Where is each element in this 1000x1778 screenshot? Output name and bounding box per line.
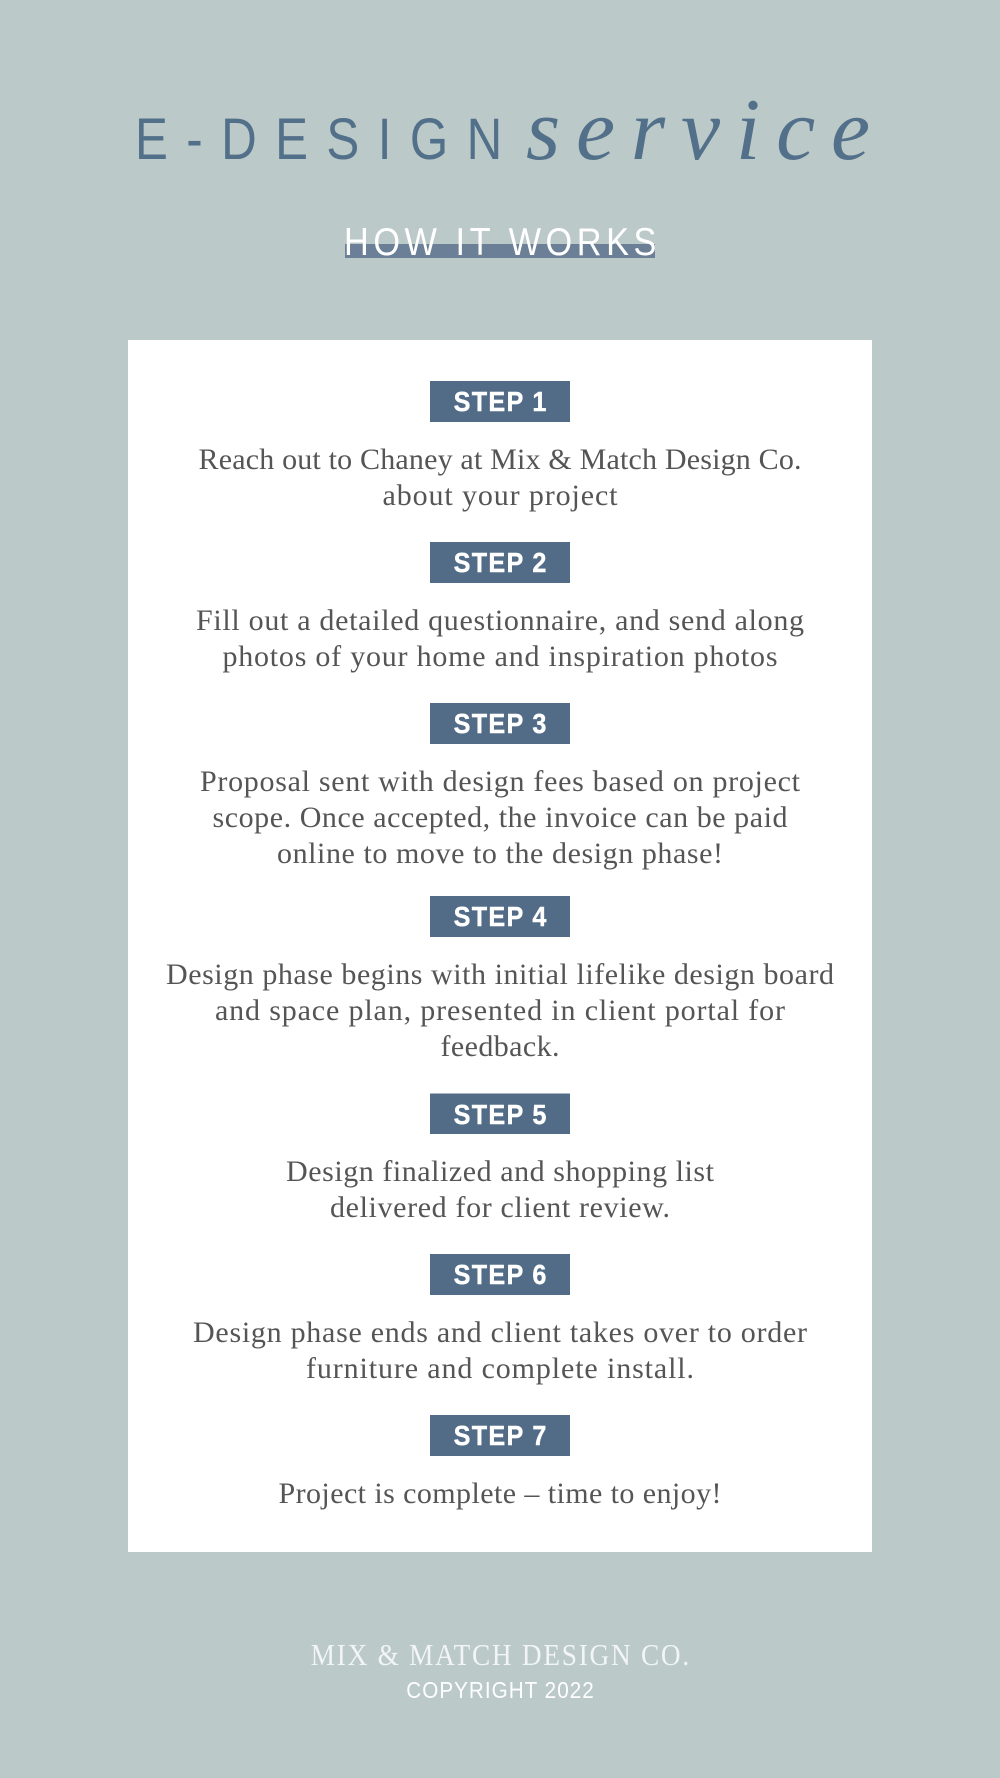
step 4: and space plan, presented in client portal for	[215, 994, 785, 1027]
step 3: online to move to the design phase!	[277, 837, 723, 870]
step 3	[200, 703, 801, 870]
step 4	[166, 896, 834, 1063]
step 7: Project is complete – time to enjoy!	[278, 1477, 722, 1510]
step 6: STEP 6	[454, 1259, 546, 1290]
subtitle: how it works: HOW IT WORKS	[344, 220, 656, 263]
step 2	[196, 542, 804, 673]
step 5: delivered for client review.	[330, 1191, 670, 1224]
step 1	[198, 381, 802, 512]
title	[135, 82, 870, 179]
title: E-DESIGN	[135, 107, 502, 172]
step 1: about your project	[382, 479, 618, 512]
step 4: Design phase begins with initial lifelike design board	[166, 958, 834, 991]
step 1: Reach out to Chaney at Mix & Match Design Co.	[198, 443, 802, 476]
step 6: Design phase ends and client takes over to order	[193, 1316, 807, 1349]
step 1: STEP 1	[454, 386, 547, 417]
footer: MIX & MATCH DESIGN CO.	[311, 1638, 689, 1672]
step 5	[286, 1094, 715, 1224]
step 6	[193, 1254, 807, 1385]
step 7: STEP 7	[454, 1420, 546, 1451]
step 5: STEP 5	[454, 1099, 547, 1130]
step 3: STEP 3	[454, 708, 546, 739]
step 4: STEP 4	[454, 901, 547, 932]
footer	[311, 1638, 689, 1703]
panel: steps	[128, 340, 872, 1552]
step 7	[278, 1415, 722, 1510]
step 3: Proposal sent with design fees based on project	[200, 765, 801, 798]
step 2: photos of your home and inspiration photos	[222, 640, 778, 673]
step 5: Design finalized and shopping list	[286, 1155, 715, 1188]
step 2: Fill out a detailed questionnaire, and send along	[196, 604, 804, 637]
step 4: feedback.	[440, 1030, 560, 1063]
title: service	[526, 82, 870, 179]
footer: COPYRIGHT 2022	[406, 1677, 594, 1703]
step 2: STEP 2	[454, 547, 546, 578]
step 6: furniture and complete install.	[306, 1352, 694, 1385]
step 3: scope. Once accepted, the invoice can be paid	[212, 801, 788, 834]
